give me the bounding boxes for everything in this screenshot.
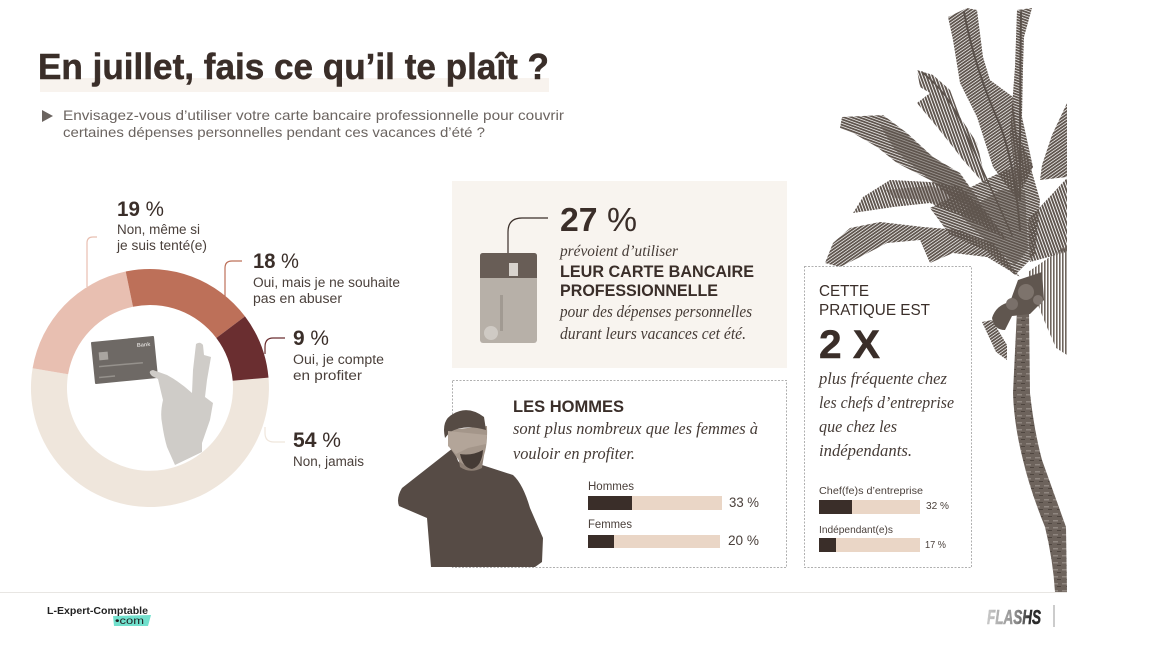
frond: low left [825,222,1020,277]
frond: top vertical [1010,8,1033,200]
hair [444,410,486,438]
donut chart [31,269,269,507]
label: 19 %: Non, même si [117,222,200,237]
palm tree [825,8,1067,592]
frond: right lower [1028,245,1067,355]
leader lines [87,237,285,442]
label: 19 %: 19 % [117,198,164,221]
panel: 2 x: indépendants. [819,441,912,460]
panel: 2 x: plus fréquente chez [818,369,947,388]
photo: man covering his eyes [398,410,543,567]
label: 54 %: Non, jamais [293,454,364,469]
panel: 27 %: pour des dépenses personnelles [559,302,752,321]
label: 18 % [253,250,400,306]
panel: 2 x: PRATIQUE EST [819,302,930,319]
title: En juillet, fais ce qu’il te plaît ? [38,46,549,87]
icon: hand holding card [92,337,213,465]
frond: lower left [853,180,1007,240]
question: certaines dépenses personnelles pendant ces vacances d’été ? [63,124,485,140]
face [448,426,487,466]
panel: 27 %: durant leurs vacances cet été. [560,324,746,343]
panel: les hommes: vouloir en profiter. [513,444,635,463]
segment: 19 % non meme si [33,272,133,374]
coconuts [992,272,1044,330]
bar: independants: 17 % [925,539,946,551]
frond: right upper [1028,103,1067,262]
bar: independants: Indépendant(e)s [819,524,893,536]
frond: big left [840,115,1000,233]
panel: les hommes [452,380,786,568]
bar: femmes: Femmes [588,519,632,531]
panel: 2 x: CETTE [819,283,869,300]
segment: 54 % non jamais [31,368,269,507]
logo: L-Expert-Comptable.com: •com [115,615,144,627]
panel: 27 %: LEUR CARTE BANCAIRE [560,263,754,281]
label: 54 %: 54 % [293,429,341,452]
label: 54 % [293,429,364,469]
logo: flashs: FLASHS [987,607,1041,629]
panel: 2 x: les chefs d’entreprise [819,393,954,412]
logo: L-Expert-Comptable.com [47,605,151,627]
label: 9 %: 9 % [293,327,329,350]
panel: 27 %: prévoient d’utiliser [559,243,679,260]
panel: 2 x [804,266,972,568]
hand on face [448,431,487,454]
panel: les hommes: LES HOMMES [513,397,624,416]
beard [460,450,483,469]
bar: femmes [588,519,759,548]
panel: 2 x: 2 X [819,323,880,367]
sweater [398,448,543,567]
bank card: Bank [137,342,152,349]
segment: 9 % oui je compte [216,316,268,381]
crown mass [930,165,1040,275]
label: 9 % [293,327,384,383]
panel: 27 %: 27 % [560,201,637,238]
label: 18 %: pas en abuser [253,291,343,306]
label: 18 %: Oui, mais je ne souhaite [253,275,400,290]
bar: femmes: 20 % [728,533,759,548]
connector line [508,218,548,253]
label: 9 %: Oui, je compte [293,352,384,367]
panel: 27 % [452,181,787,368]
question: Envisagez-vous d’utiliser votre carte bancaire professionnelle pour couvrir [63,107,564,123]
logo: L-Expert-Comptable.com: L-Expert-Comptable [47,605,148,617]
frond: top left [948,8,1033,230]
label: 9 %: en profiter [293,368,363,383]
icon: vertical card [480,253,537,343]
panel: 27 %: PROFESSIONNELLE [560,282,718,300]
panel: 2 x: que chez les [819,417,897,436]
panel: les hommes: sont plus nombreux que les femmes à [513,419,758,438]
label: 18 %: 18 % [253,250,299,273]
footer rule [0,592,1067,593]
bar: chefs d'entreprise: 32 % [926,500,949,512]
bar: chefs d'entreprise [819,485,949,514]
hanging frond [982,320,1007,360]
neck [458,455,484,471]
bar: hommes [588,481,759,510]
bar: hommes: Hommes [588,481,634,493]
label: 19 %: je suis tenté(e) [116,238,207,253]
segment: 18 % oui mais [126,269,245,338]
hand [150,343,213,465]
bar: independants [819,524,946,552]
bar: chefs d'entreprise: Chef(fe)s d’entreprise [819,485,923,497]
bar: hommes: 33 % [729,495,759,510]
trunk [1013,310,1067,592]
frond: upper left [917,70,1012,235]
label: 19 % [116,198,207,253]
question [42,107,564,140]
